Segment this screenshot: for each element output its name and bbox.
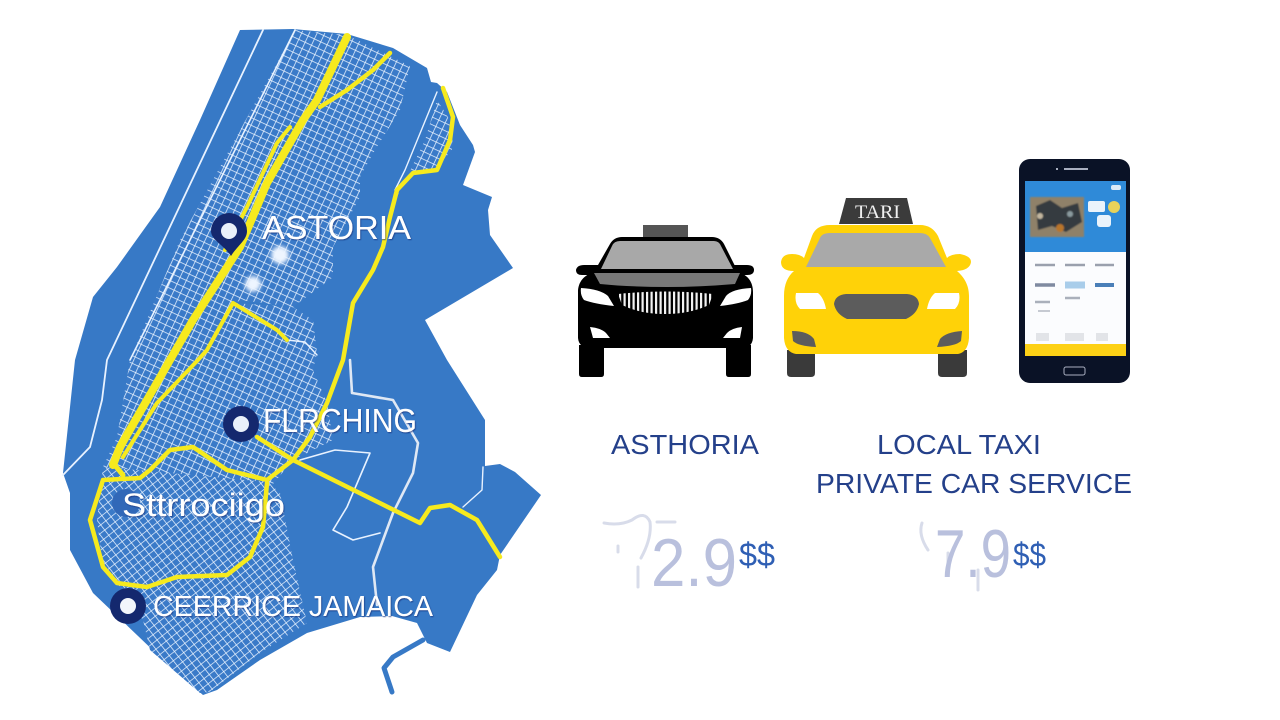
street grid: eastern strip	[388, 100, 453, 215]
phone casing	[1019, 159, 1130, 383]
phone speaker	[1056, 168, 1088, 170]
label: Flushing: FLRCHING	[263, 402, 417, 439]
label: southern district: Sttrrociigo	[122, 487, 285, 523]
pin: Flushing	[223, 406, 259, 442]
infographic canvas	[62, 29, 1131, 695]
caption: local taxi: LOCAL TAXI	[877, 429, 1041, 460]
black car windshield	[601, 241, 733, 269]
taxi fog lamps	[792, 331, 962, 347]
icon: black private car	[576, 225, 754, 377]
icon: smartphone app	[1019, 159, 1130, 383]
taxi roof sign: TARI	[855, 202, 900, 223]
price: 7.9: 7.9	[935, 516, 1011, 592]
map landmass	[63, 29, 541, 695]
icon: yellow taxi	[781, 198, 971, 377]
yellow transit routes	[90, 37, 500, 587]
taxi roof sign	[839, 198, 913, 224]
taxi windshield	[806, 233, 946, 267]
label: Astoria: ASTORIA	[262, 209, 411, 246]
bright street patches near Astoria	[245, 246, 289, 292]
black car grille	[619, 291, 712, 315]
app body	[1025, 252, 1126, 344]
black car body	[578, 237, 753, 348]
black car roof box	[643, 225, 688, 238]
panel: transit map	[63, 29, 541, 695]
app header icons	[1088, 185, 1121, 227]
taxi headlights	[796, 293, 960, 309]
caption: Asthoria: ASTHORIA	[611, 429, 759, 460]
caption: private car service: PRIVATE CAR SERVICE	[816, 468, 1132, 499]
label: Jamaica: CEERRICE JAMAICA	[153, 591, 434, 623]
app yellow footer	[1025, 344, 1126, 356]
pin: southern marker	[112, 489, 140, 517]
phone home button	[1064, 367, 1085, 375]
black car wheels	[579, 345, 751, 377]
price: 2.9: 2.9	[651, 525, 737, 601]
street grid: upper district	[130, 30, 410, 360]
river inlet	[384, 640, 423, 692]
black car headlights	[581, 288, 751, 306]
black car hood	[594, 273, 740, 287]
taxi body	[781, 225, 971, 354]
street grid: southern district	[97, 467, 307, 693]
price ghost marks: left	[604, 515, 675, 587]
app header	[1025, 181, 1126, 252]
app photo	[1030, 197, 1084, 237]
white local streets	[63, 30, 483, 605]
taxi grille	[834, 294, 919, 319]
taxi wheels	[787, 350, 967, 377]
black car mirrors	[576, 265, 754, 275]
street grid: central district	[103, 303, 333, 490]
price currency: left: $$	[739, 536, 775, 573]
pin: Jamaica	[110, 588, 146, 624]
price currency: right: $$	[1013, 536, 1046, 573]
black car fog lamps	[590, 327, 742, 338]
app list rows	[1035, 265, 1114, 337]
price ghost marks: right	[921, 523, 978, 590]
pin: Astoria	[211, 213, 247, 256]
